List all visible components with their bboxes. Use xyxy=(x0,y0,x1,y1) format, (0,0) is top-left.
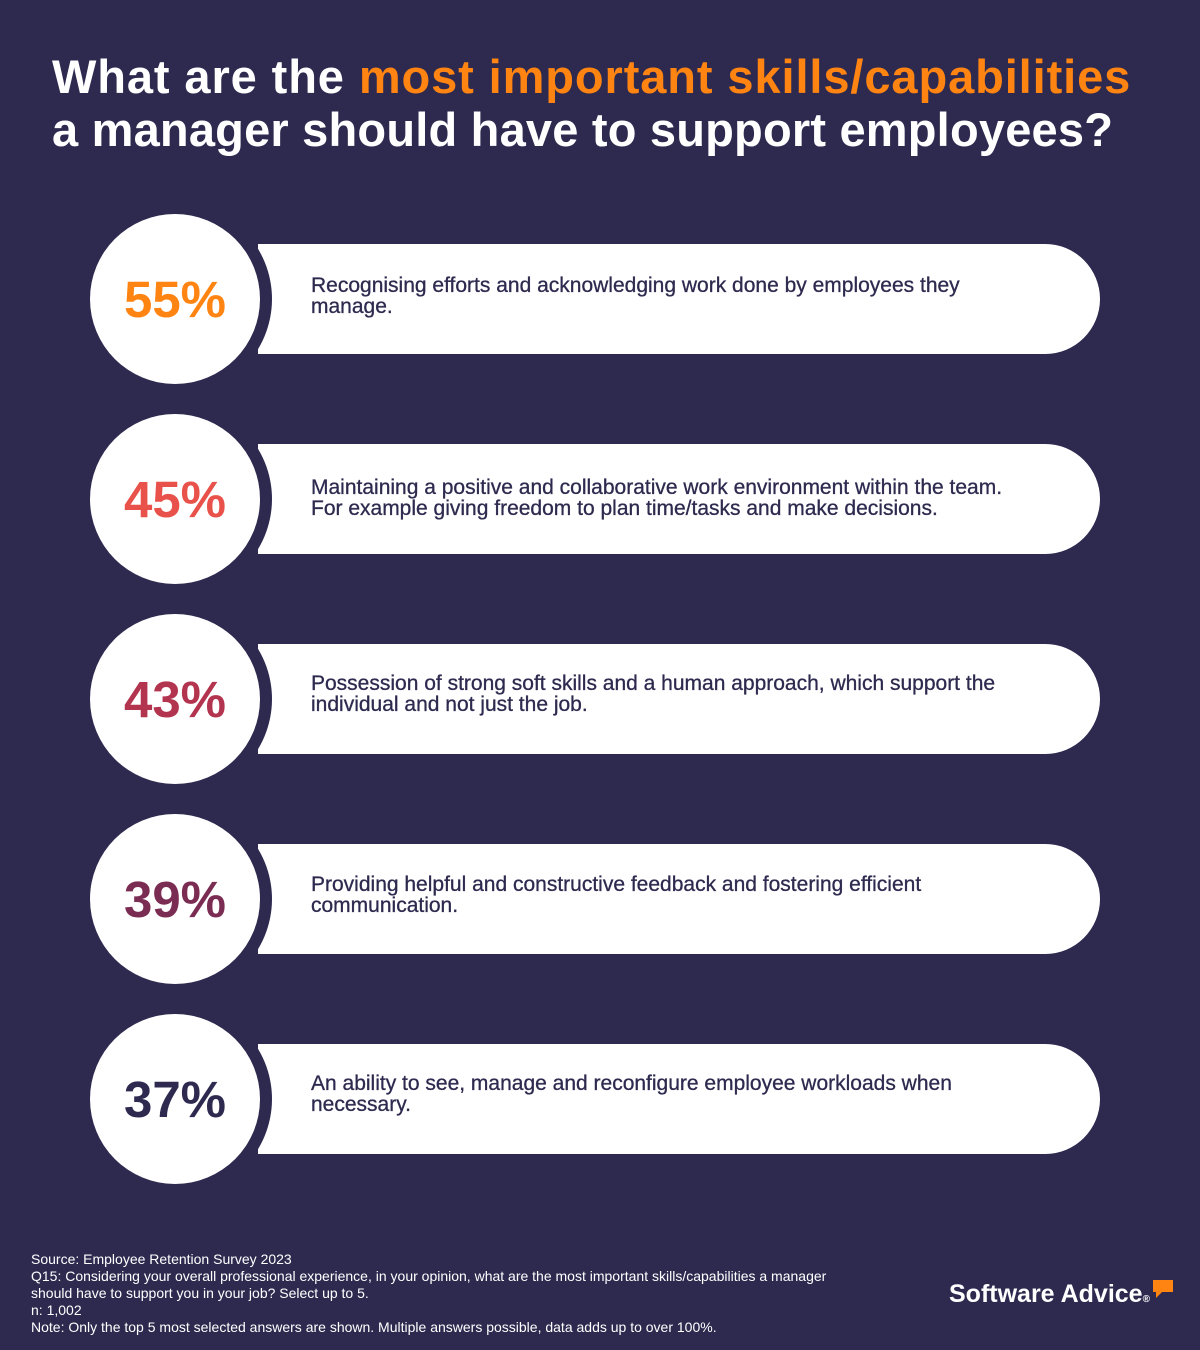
footer notes: should have to support you in your job? Select up to 5. xyxy=(31,1285,369,1301)
text: 55%: Recognising efforts and acknowledging work done by employees they xyxy=(311,274,960,297)
text: 37%: An ability to see, manage and reconfigure employee workloads when xyxy=(311,1072,952,1095)
text: 45%: Maintaining a positive and collaborative work environment within the team. xyxy=(311,476,1002,499)
stat: 43%: 43% xyxy=(124,670,226,728)
stat: 39% xyxy=(90,814,260,984)
footer notes xyxy=(31,1251,826,1335)
stat: 43% xyxy=(90,614,260,784)
footer notes: Note: Only the top 5 most selected answers are shown. Multiple answers possible, data adds up to over 100%. xyxy=(31,1319,717,1335)
stat: 55% xyxy=(90,214,260,384)
title: What are the most important skills/capabilities xyxy=(52,50,1131,103)
text: 43%: Possession of strong soft skills and a human approach, which support the xyxy=(311,672,995,695)
text: 55%: manage. xyxy=(311,295,393,318)
text: 37% xyxy=(310,1072,952,1116)
footer notes: Source: Employee Retention Survey 2023 xyxy=(31,1251,292,1267)
text: 39%: Providing helpful and constructive feedback and fostering efficient xyxy=(311,873,921,896)
text: 39%: communication. xyxy=(311,894,458,917)
row: 37% xyxy=(90,1014,1100,1184)
stat: 55%: 55% xyxy=(124,270,226,328)
text: 39% xyxy=(311,873,922,917)
text: 55% xyxy=(311,274,960,318)
row: 45% xyxy=(90,414,1100,584)
stat: 37% xyxy=(90,1014,260,1184)
text: 43% xyxy=(311,672,995,716)
text: 43%: individual and not just the job. xyxy=(311,693,588,716)
text: 45%: For example giving freedom to plan time/tasks and make decisions. xyxy=(311,497,938,520)
row: 55% xyxy=(90,214,1100,384)
stat: 45% xyxy=(90,414,260,584)
footer notes: Q15: Considering your overall professional experience, in your opinion, what are the most important skills/capabilities a manager xyxy=(31,1268,826,1284)
row: 39% xyxy=(90,814,1100,984)
title xyxy=(52,50,1131,156)
logo: Software Advice® xyxy=(949,1280,1150,1308)
text: 45% xyxy=(311,476,1002,520)
stat: 37%: 37% xyxy=(124,1070,226,1128)
footer notes: n: 1,002 xyxy=(31,1302,82,1318)
text: 37%: necessary. xyxy=(311,1093,411,1116)
title: a manager should have to support employees? xyxy=(52,103,1113,156)
row: 43% xyxy=(90,614,1100,784)
stat: 45%: 45% xyxy=(124,470,226,528)
stat: 39%: 39% xyxy=(124,870,226,928)
